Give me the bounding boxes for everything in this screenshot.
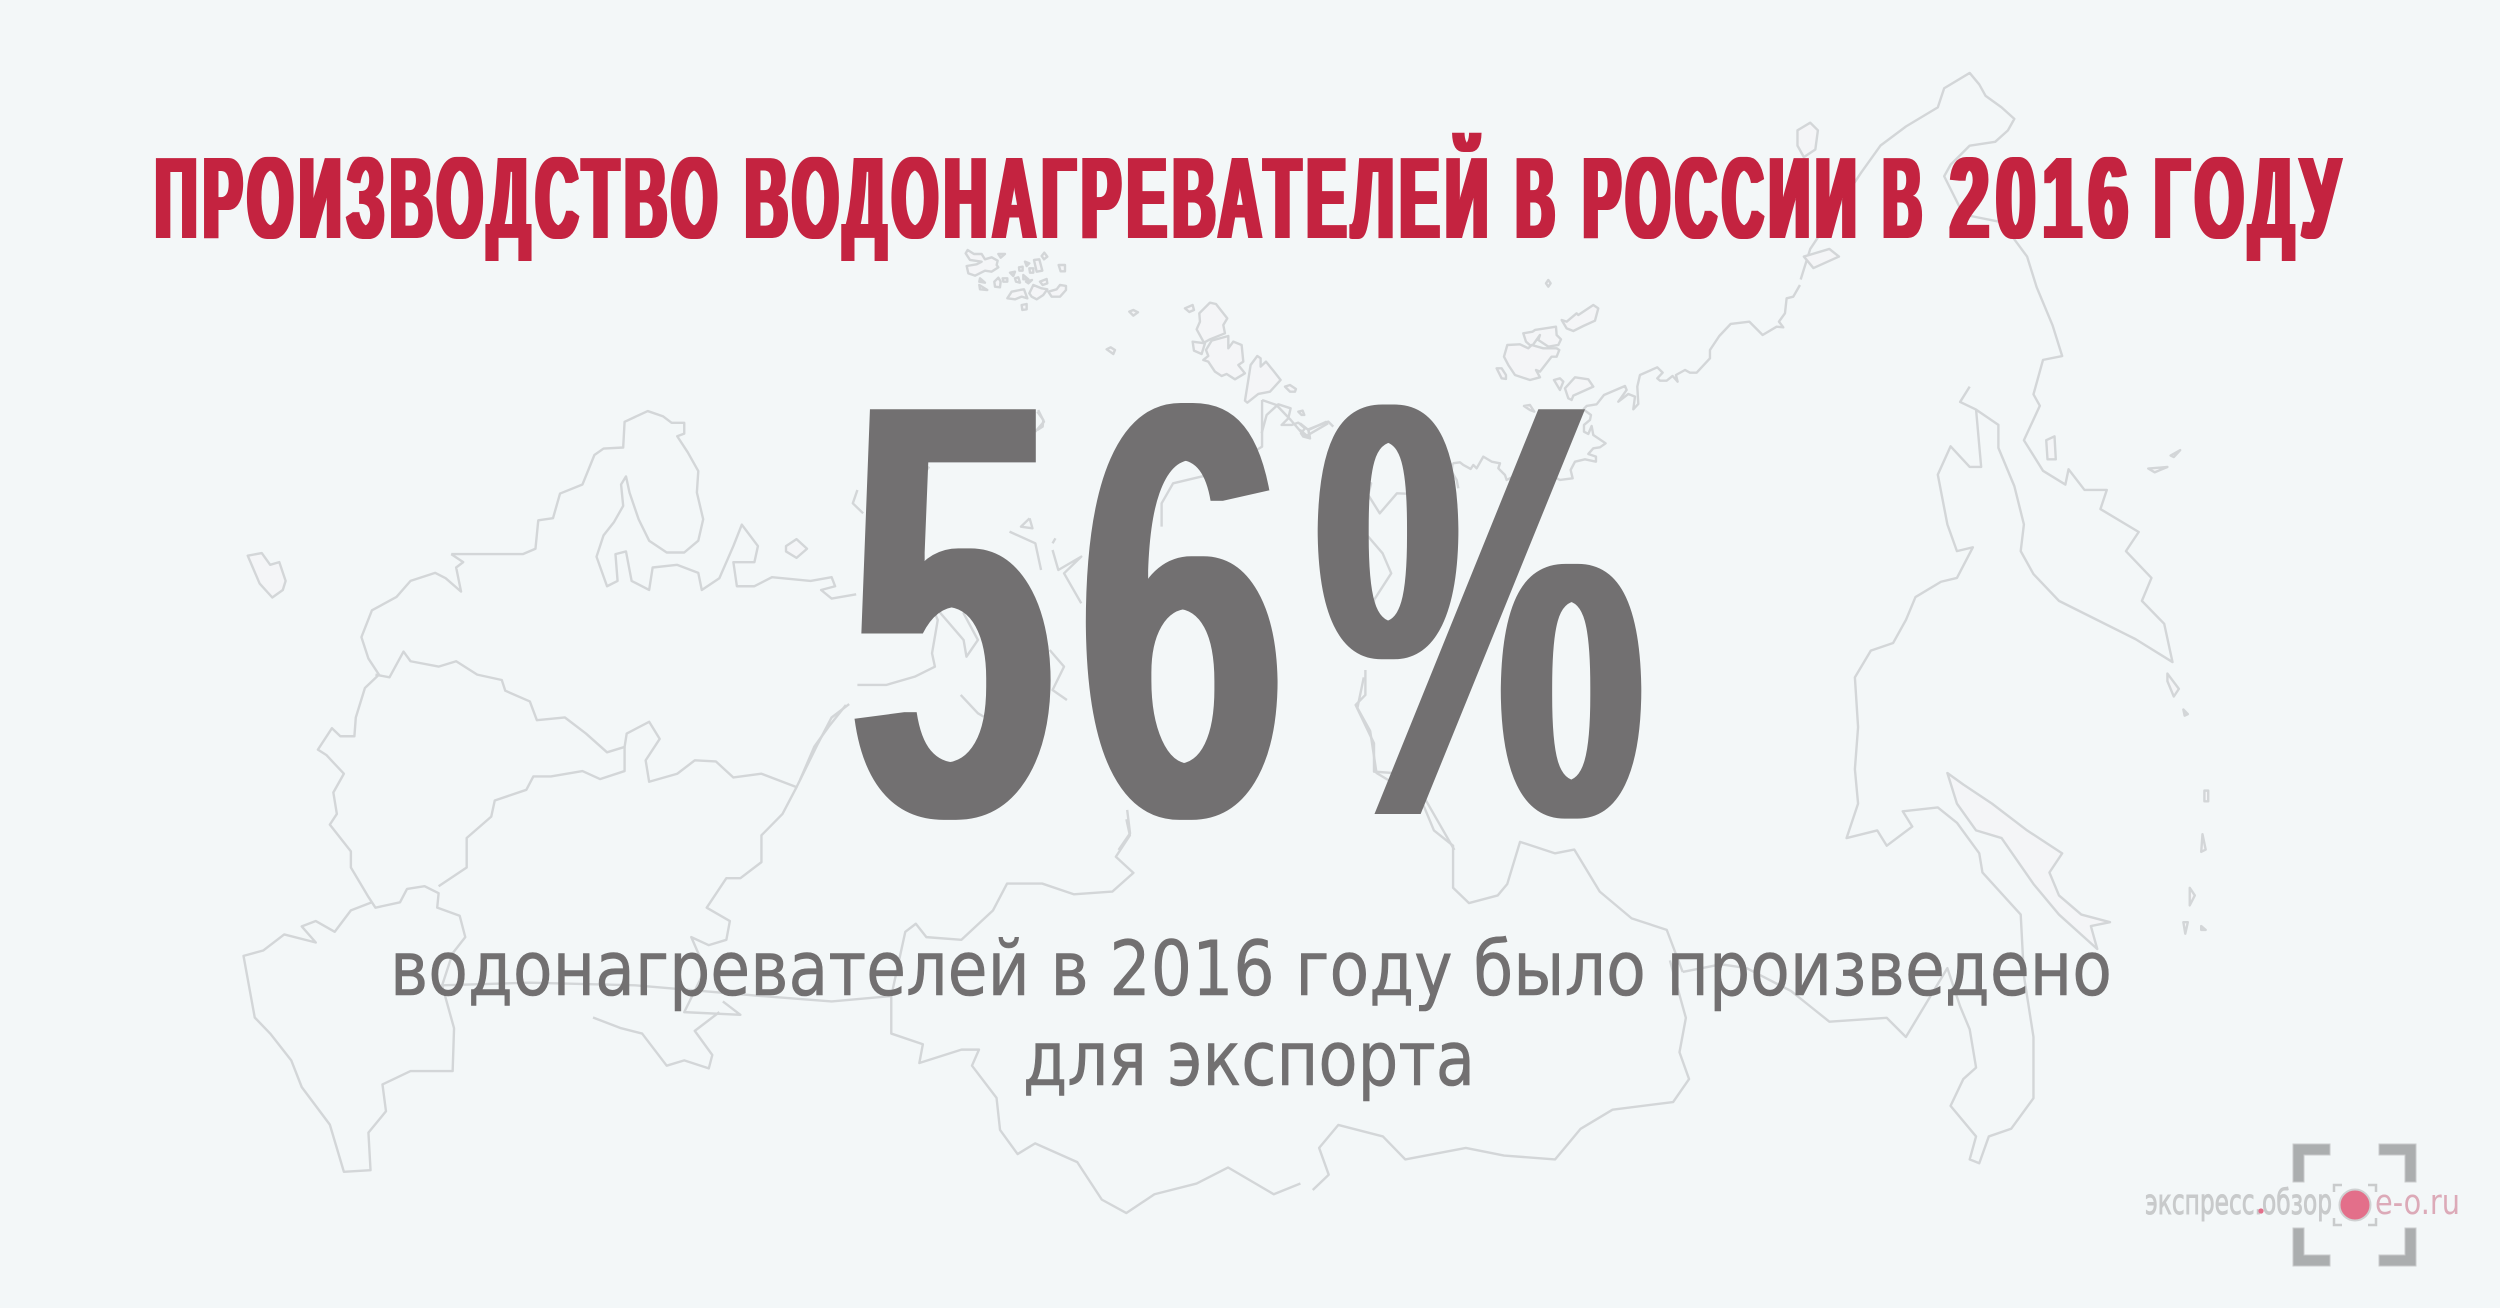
logo: wordmark: экспресс.обзор [2145, 1183, 2332, 1223]
logo: red dot [2340, 1190, 2370, 1220]
caption: для экспорта [1023, 1014, 1475, 1103]
logo: small brackets [2334, 1185, 2376, 1225]
logo: domain: e-o.ru [2375, 1183, 2460, 1223]
title: В [1883, 133, 1927, 263]
title: РОССИИ [1583, 133, 1862, 263]
title: 2016 [1950, 133, 2135, 263]
title: ВОДОНАГРЕВАТЕЛЕЙ [745, 132, 1494, 263]
caption: водонагревателей в 2016 году было произведено [390, 924, 2112, 1013]
big number: 56%: 56% [848, 275, 1645, 945]
logo watermark [2145, 1144, 2460, 1266]
title: В [1516, 133, 1560, 263]
logo: small dot [2258, 1208, 2264, 1214]
map: outline of Russia [244, 73, 2208, 1213]
logo: viewfinder corners [2293, 1144, 2416, 1266]
caption [390, 924, 2112, 1103]
title: ПРОИЗВОДСТВО [155, 133, 723, 263]
title [155, 132, 2346, 263]
